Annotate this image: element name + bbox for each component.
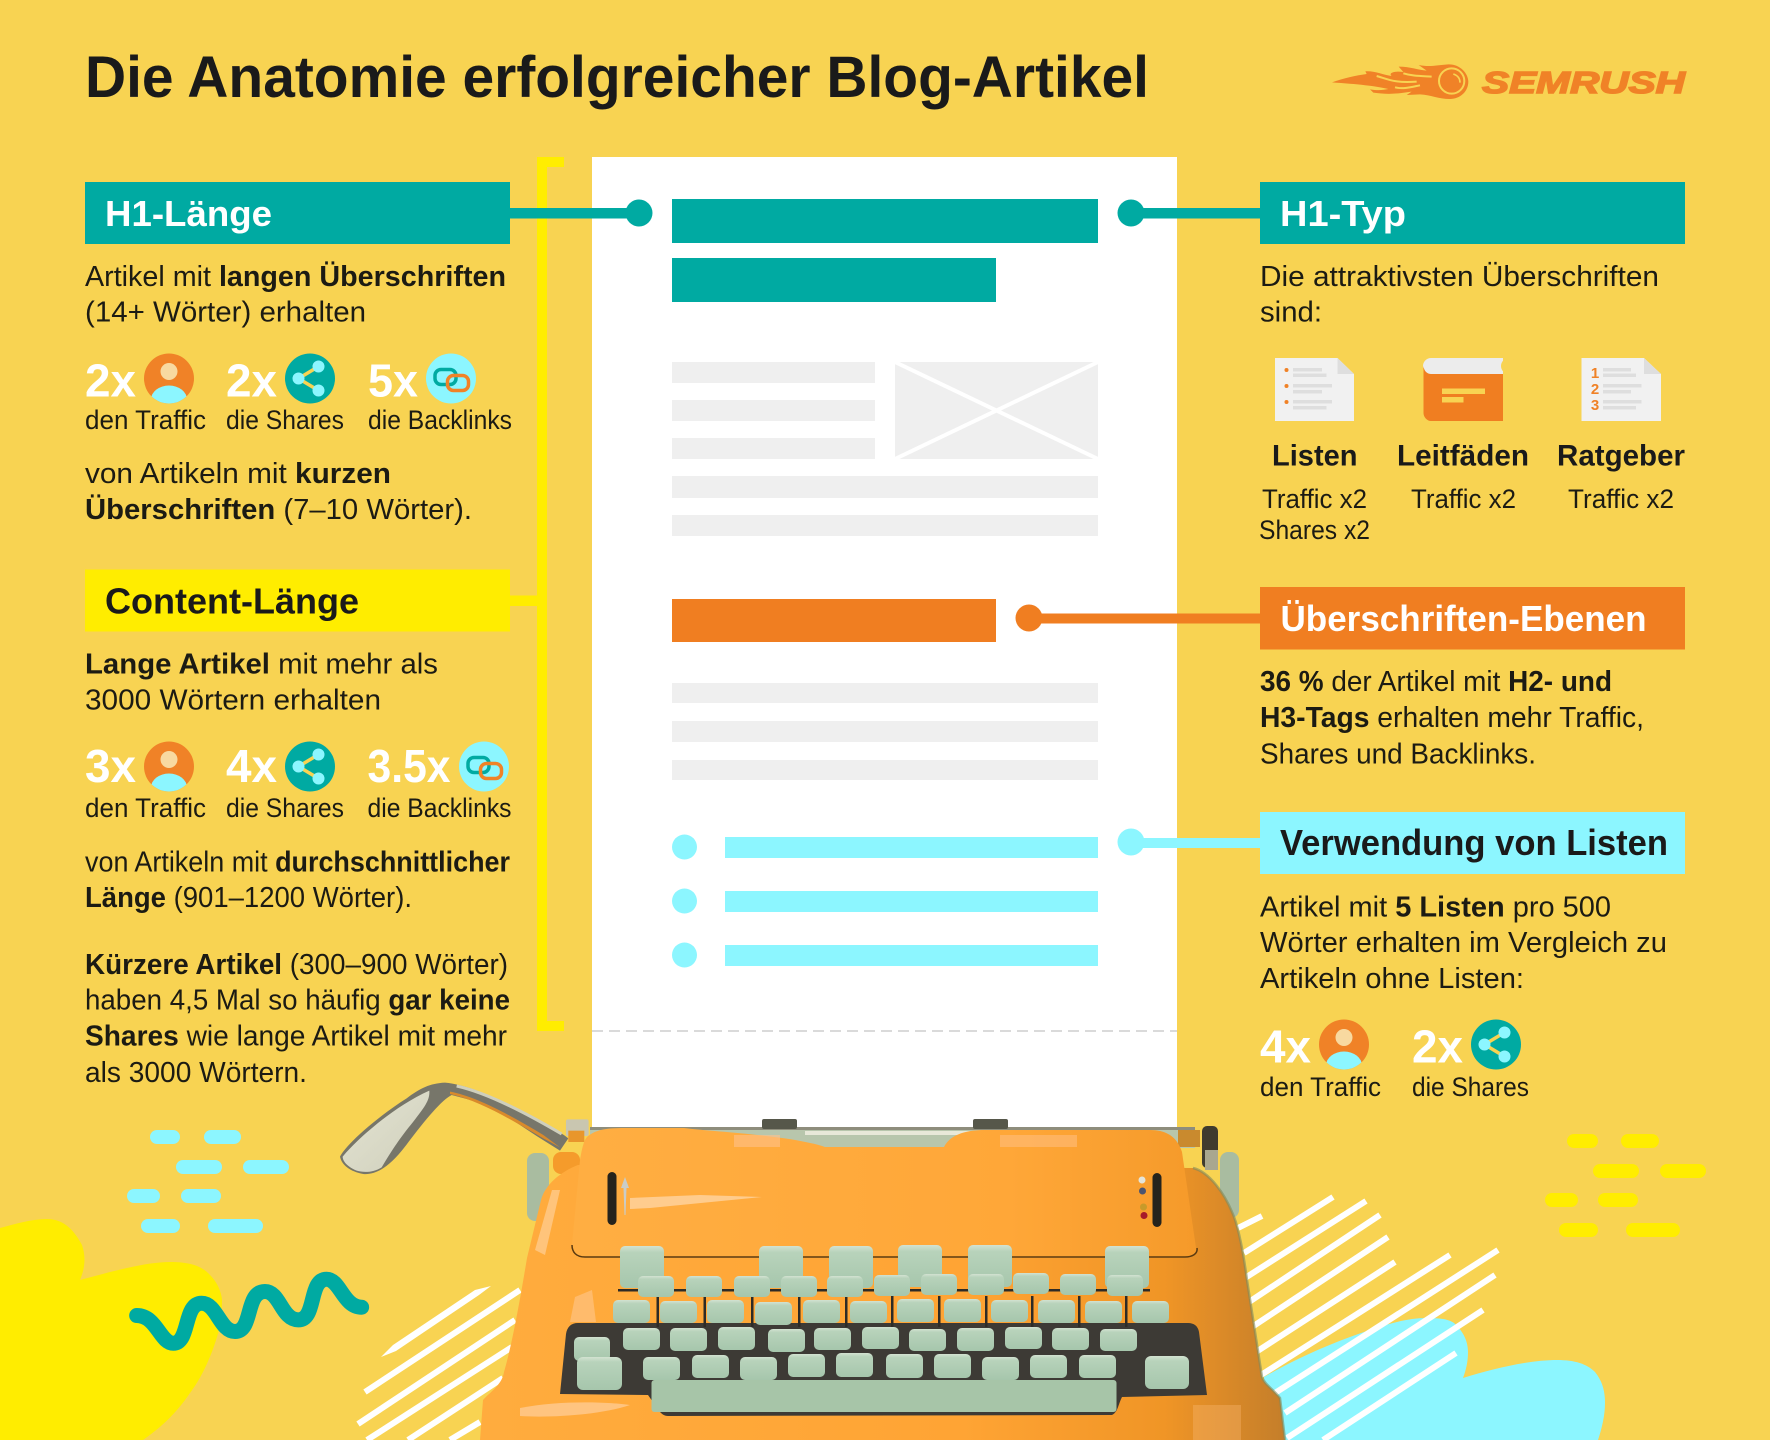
- platen knobs: [527, 1152, 1239, 1221]
- key bar and stems: [618, 1289, 1150, 1327]
- text: intro: (14+ Wörter) erhalten: [85, 296, 366, 328]
- connector Überschriften-Ebenen: [1016, 604, 1260, 632]
- stat: 3x traffic: [85, 740, 206, 823]
- stat: 4x traffic: den Traffic: [1260, 1072, 1381, 1102]
- panel: H1-Typ: [1259, 182, 1685, 545]
- stat: 3x traffic: 3x: [85, 740, 136, 792]
- text: intro: [1260, 261, 1659, 328]
- typewriter: [340, 1083, 1285, 1440]
- heading: Content-Länge: Content-Länge: [105, 580, 359, 622]
- grey text lines: [672, 362, 1098, 780]
- carriage lever: [340, 1083, 589, 1174]
- label: Listen: [1259, 440, 1370, 545]
- heading: Überschriften-Ebenen: Überschriften-Ebenen: [1280, 598, 1646, 639]
- text: shorter articles: Kürzere Artikel (300–900 Wörter): [85, 949, 508, 981]
- connector Content-Länge: [510, 596, 540, 606]
- panel: Überschriften-Ebenen: [1260, 587, 1685, 770]
- stat: 2x shares: [1412, 1020, 1529, 1102]
- heading: H1-Länge: H1-Länge: [105, 193, 272, 234]
- stat: 5x backlinks: die Backlinks: [368, 405, 512, 435]
- text: body: [1260, 892, 1667, 995]
- key row 5: [577, 1353, 1189, 1390]
- title: Die Anatomie erfolgreicher Blog-Artikel: [85, 45, 1149, 110]
- cover highlights: [520, 1135, 1241, 1440]
- text: body: Wörter erhalten im Vergleich zu: [1260, 927, 1667, 959]
- text: intro: 3000 Wörtern erhalten: [85, 684, 381, 716]
- key row 2: [638, 1273, 1143, 1297]
- stat: 4x shares: 4x: [226, 740, 277, 792]
- label: Leitfäden: Leitfäden: [1397, 440, 1529, 472]
- stat: 2x traffic: 2x: [85, 354, 136, 406]
- icon: list document: [1275, 358, 1354, 421]
- platen and paper holders: [590, 1119, 1218, 1170]
- label: Leitfäden: [1397, 440, 1529, 514]
- stat: 3x traffic: den Traffic: [85, 793, 206, 823]
- heading: H1-Typ: H1-Typ: [1280, 193, 1406, 234]
- logo: SEMrush: [1332, 64, 1686, 100]
- icon: numbered document: 3: [1591, 397, 1599, 414]
- white diagonal stripes left: [358, 1286, 520, 1440]
- text: body: [1260, 666, 1644, 770]
- text: shorter articles: [85, 949, 510, 1089]
- decorative cyan dashes: [127, 1130, 289, 1233]
- text: comparison: [85, 458, 472, 526]
- paper document: [592, 157, 1177, 1137]
- logo: SEMrush: SEMRUSH: [1482, 65, 1686, 100]
- heading: Überschriften-Ebenen: [1260, 587, 1685, 650]
- text: intro: [85, 648, 438, 716]
- stat: 3.5x backlinks: 3.5x: [368, 740, 451, 792]
- key row 3: [613, 1299, 1169, 1325]
- stat: 4x traffic: 4x: [1260, 1020, 1311, 1072]
- stat: 2x shares: [226, 354, 344, 435]
- label: Listen: Shares x2: [1259, 515, 1370, 545]
- squiggle: [137, 1279, 362, 1343]
- stat: 4x shares: [226, 740, 344, 823]
- function keys: [620, 1245, 1149, 1288]
- orange H2 bar: [672, 599, 996, 642]
- icon: numbered document: 1: [1591, 365, 1599, 382]
- panel: Content-Länge: [85, 570, 512, 1089]
- stat: 2x shares: 2x: [226, 354, 277, 406]
- yellow bracket: [542, 162, 564, 1026]
- stat: 2x traffic: den Traffic: [85, 405, 206, 435]
- text: body: 36 % der Artikel mit H2- und: [1260, 666, 1612, 698]
- text: intro: Die attraktivsten Überschriften: [1260, 261, 1659, 293]
- icon: guide book: [1423, 358, 1517, 421]
- heading: Verwendung von Listen: Verwendung von Listen: [1280, 822, 1668, 863]
- icon: numbered document: [1582, 358, 1661, 421]
- heading: Content-Länge: [85, 570, 510, 632]
- text: comparison: Überschriften (7–10 Wörter).: [85, 493, 472, 526]
- panel: Verwendung von Listen: [1260, 812, 1685, 1102]
- text: intro: Artikel mit langen Überschriften: [85, 260, 506, 293]
- text: body: H3-Tags erhalten mehr Traffic,: [1260, 702, 1644, 734]
- label: Ratgeber: Ratgeber: [1557, 440, 1685, 472]
- label: Listen: Listen: [1272, 440, 1358, 472]
- icon: numbered document: 2: [1591, 381, 1599, 398]
- label: Leitfäden: Traffic x2: [1411, 484, 1516, 514]
- connector H1-Länge: [510, 200, 652, 226]
- text: body: Artikel mit 5 Listen pro 500: [1260, 892, 1611, 924]
- stat: 2x shares: 2x: [1412, 1020, 1463, 1072]
- stat: 2x traffic: [85, 354, 206, 435]
- label: Ratgeber: [1557, 440, 1685, 514]
- connector Listen: [1118, 828, 1260, 856]
- cyan blob: [1264, 1318, 1605, 1440]
- text: comparison: Länge (901–1200 Wörter).: [85, 882, 412, 914]
- stat: 4x shares: die Shares: [226, 793, 344, 823]
- key row 4: [574, 1327, 1137, 1361]
- image placeholder: [895, 362, 1098, 459]
- body shell: [480, 1165, 1285, 1440]
- decorative yellow dashes: [1545, 1134, 1706, 1237]
- stat: 3.5x backlinks: [368, 740, 512, 823]
- top cover: [572, 1128, 1196, 1258]
- space bar: [652, 1380, 1116, 1412]
- text: comparison: von Artikeln mit kurzen: [85, 458, 391, 490]
- stat: 5x backlinks: [368, 354, 512, 435]
- yellow blob: [0, 1219, 222, 1440]
- panel: H1-Länge: [85, 182, 512, 526]
- list bullets and lines: [672, 834, 1098, 968]
- text: intro: Lange Artikel mit mehr als: [85, 648, 438, 680]
- text: intro: [85, 260, 506, 328]
- heading: H1-Länge: [85, 182, 510, 244]
- slots and indicators: [608, 1172, 1162, 1227]
- label: Ratgeber: Traffic x2: [1568, 484, 1674, 514]
- stat: 2x shares: die Shares: [1412, 1072, 1529, 1102]
- text: shorter articles: als 3000 Wörtern.: [85, 1057, 307, 1089]
- text: intro: sind:: [1260, 296, 1322, 328]
- white diagonal stripes right: [1238, 1197, 1498, 1440]
- text: body: Shares und Backlinks.: [1260, 738, 1536, 770]
- connector H1-Typ: [1118, 200, 1260, 226]
- stat: 3.5x backlinks: die Backlinks: [368, 793, 512, 823]
- label: Listen: Traffic x2: [1262, 484, 1367, 514]
- text: body: Artikeln ohne Listen:: [1260, 963, 1524, 995]
- stat: 2x shares: die Shares: [226, 405, 344, 435]
- text: comparison: [85, 846, 510, 914]
- text: comparison: von Artikeln mit durchschnittlicher: [85, 846, 510, 878]
- heading: Verwendung von Listen: [1260, 812, 1685, 874]
- keyboard well: [560, 1323, 1207, 1416]
- heading: H1-Typ: [1260, 182, 1685, 244]
- teal H1 bars: [672, 199, 1098, 302]
- text: shorter articles: haben 4,5 Mal so häufig gar keine: [85, 984, 510, 1016]
- stat: 5x backlinks: 5x: [368, 354, 418, 406]
- stat: 4x traffic: [1260, 1020, 1381, 1102]
- text: shorter articles: Shares wie lange Artikel mit mehr: [85, 1020, 507, 1052]
